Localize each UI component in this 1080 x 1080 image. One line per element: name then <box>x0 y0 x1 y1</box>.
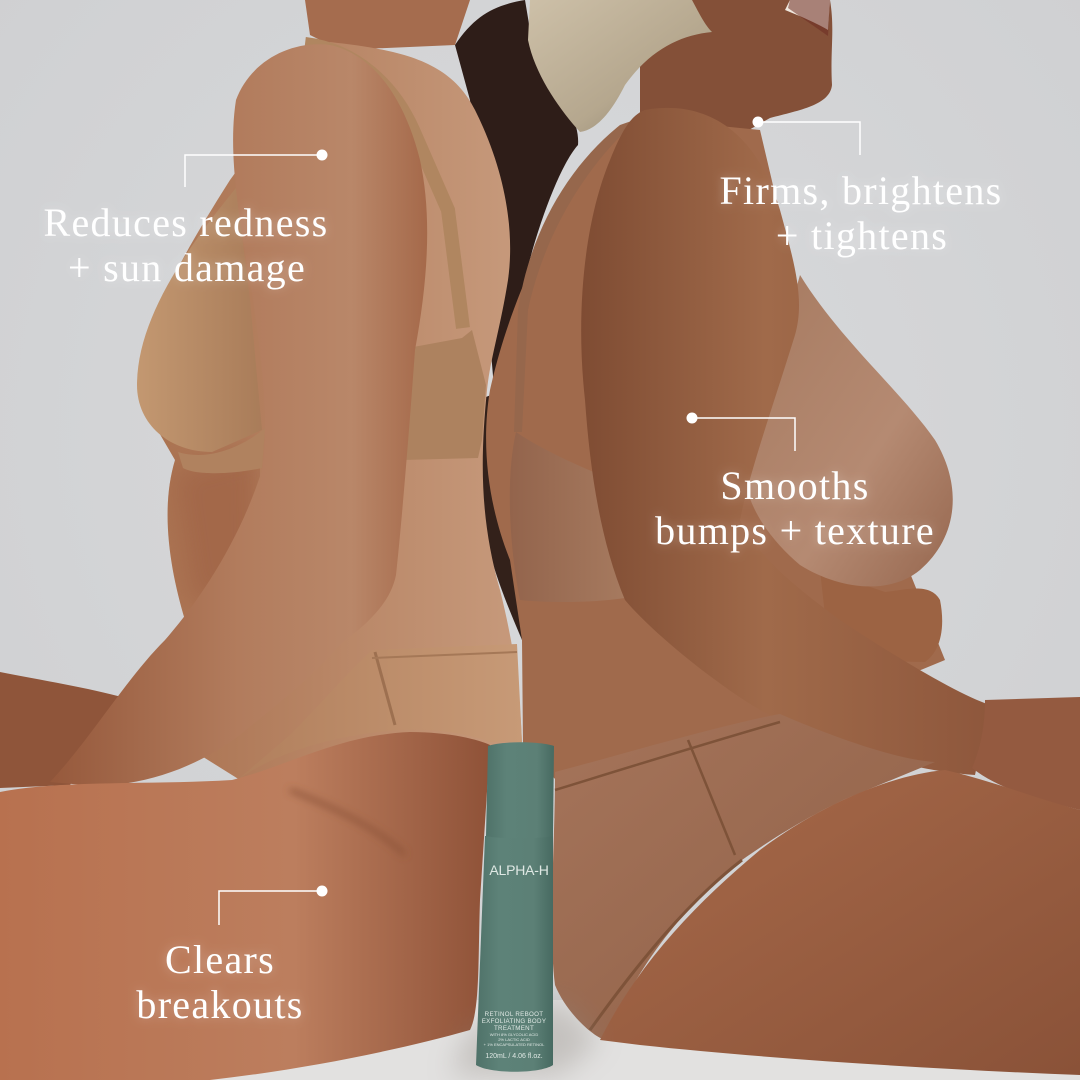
callout: smooths: Smooths <box>720 463 870 508</box>
left figure: bra cup <box>137 188 262 452</box>
callout: reduces redness: Reduces redness <box>44 200 328 245</box>
product ingredients: 2% LACTIC ACID <box>498 1037 530 1042</box>
right figure: under bust <box>820 570 942 662</box>
bottle body <box>476 836 553 1072</box>
callout: firms, brightens: + tightens <box>776 213 948 258</box>
far leg: left figure <box>0 672 125 788</box>
bottle cap <box>486 742 554 838</box>
callout: reduces redness: + sun damage <box>68 245 306 290</box>
left figure: arm <box>50 44 427 786</box>
hair: dark ponytail <box>455 0 578 640</box>
left figure: torso <box>139 42 522 780</box>
soft shadow behind bottle <box>450 1000 600 1075</box>
left figure: back band <box>402 330 486 460</box>
right figure: arm <box>581 108 990 775</box>
callout: firms, brightens <box>719 116 1003 258</box>
left figure: thigh <box>0 732 490 1080</box>
right figure: bra cup <box>744 275 953 586</box>
right figure: hand <box>972 697 1080 810</box>
left figure: midriff shading <box>168 462 260 599</box>
callout: clears breakouts: Clears <box>165 937 275 982</box>
brand name: ALPHA-H <box>489 862 549 878</box>
product ingredients: + 1% ENCAPSULATED RETINOL <box>484 1042 545 1047</box>
right figure: neck and face <box>640 0 832 135</box>
product size: 120mL / 4.06 fl.oz. <box>485 1053 543 1060</box>
floor <box>0 1000 1080 1080</box>
right figure: bra strap <box>514 118 640 432</box>
callout: firms, brightens: Firms, brightens <box>719 168 1003 213</box>
right figure: torso <box>486 118 945 780</box>
product name: RETINOL REBOOT <box>485 1011 543 1018</box>
product bottle <box>476 742 554 1072</box>
left figure: neck <box>305 0 470 50</box>
callout: smooths <box>655 412 935 553</box>
right figure: thigh <box>600 770 1080 1075</box>
left figure: underwear <box>235 644 522 782</box>
callout: clears breakouts: breakouts <box>136 982 304 1027</box>
product name: TREATMENT <box>494 1025 534 1032</box>
product name: EXFOLIATING BODY <box>482 1018 546 1025</box>
callout: reduces redness <box>44 150 328 290</box>
right figure: grey blonde hair <box>528 0 712 132</box>
right figure: bra band <box>510 432 625 602</box>
callout: clears breakouts <box>136 886 328 1027</box>
product ingredients: WITH 8% GLYCOLIC ACID <box>490 1032 538 1037</box>
callout: smooths: bumps + texture <box>655 508 935 553</box>
left figure: bra strap <box>305 44 463 328</box>
right figure: underwear <box>552 714 935 1040</box>
left figure: bra under band <box>178 428 265 473</box>
